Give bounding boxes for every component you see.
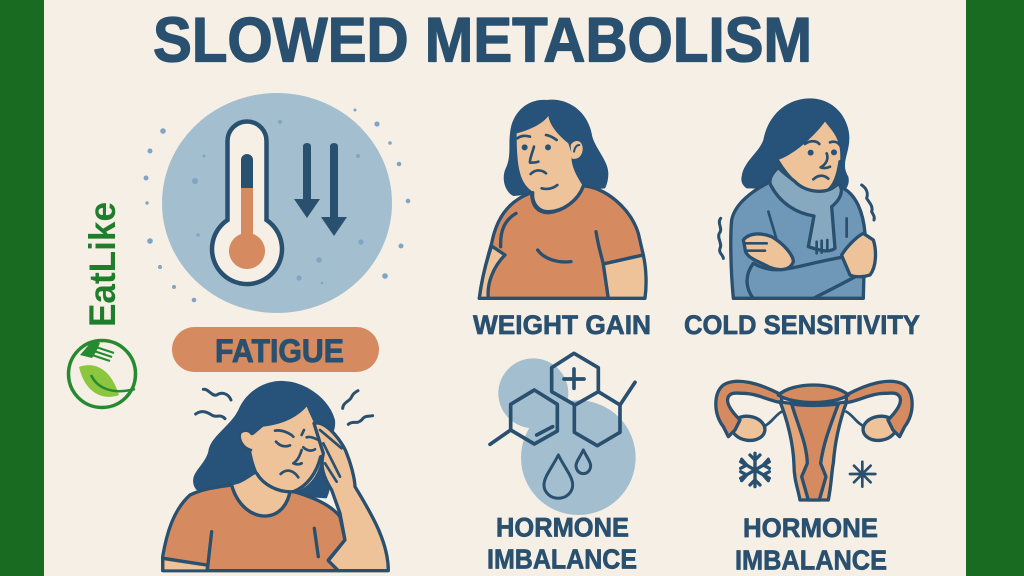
right hand [842,233,876,277]
brand wordmark: EatLike [82,202,123,327]
face and neck [517,116,583,213]
scarf fringe and coat seams [768,212,847,253]
eyes [808,149,837,156]
ligaments [763,412,865,427]
label: hormone imbalance right [735,513,887,576]
left hand [743,234,793,270]
shirt [163,485,345,571]
figure: weight gain woman [479,100,646,298]
hair [741,98,849,190]
logo badge [68,340,136,408]
label: hormone imbalance right: IMBALANCE [735,544,887,576]
facial features [517,135,557,189]
snowflake large [741,453,769,487]
arrows pointing down [294,143,347,236]
stress squiggles [196,389,373,424]
pill: fatigue label: FATIGUE [215,333,344,369]
scattered dots [144,108,410,302]
molecule hexagons [490,353,635,446]
crossed arms [747,257,858,298]
label: hormone imbalance left: IMBALANCE [487,544,637,574]
right arm [603,255,646,298]
shirt fold lines [501,213,603,264]
hair [504,100,608,196]
neck [233,473,291,516]
inner cavity [792,404,838,500]
face [240,407,322,492]
label: cold sensitivity: COLD SENSITIVITY [684,310,920,340]
blue blobs [498,358,636,515]
figure: fatigued woman holding head [163,381,388,571]
title: SLOWED METABOLISM [153,6,812,76]
icon: uterus with snowflakes [716,381,912,500]
uterus body [780,402,847,500]
fallopian tubes [716,381,912,437]
icon: hormone molecules and drops [490,353,636,515]
snowflake small [850,462,875,487]
left arm [479,246,505,298]
arm and hand [314,423,388,571]
shiver squiggles [719,185,874,258]
face [778,122,840,192]
label: hormone imbalance left: HORMONE [496,512,629,542]
facial features [275,430,318,477]
eyes [522,144,551,150]
facial features [805,141,840,179]
coat [731,182,865,298]
label: hormone imbalance right: HORMONE [743,513,878,543]
left forearm [165,561,205,569]
label: weight gain: WEIGHT GAIN [473,310,651,340]
hormone drops [544,450,591,498]
logo: EatLike [68,202,136,408]
blue circle backdrop [162,93,392,313]
figure: cold sensitive woman in scarf [719,98,876,298]
fundus [778,385,848,402]
label: hormone imbalance left [487,512,637,574]
ovaries [730,414,898,443]
pill: fatigue label [172,327,379,372]
hair [193,381,335,498]
shirt [479,186,643,298]
thermometer [212,122,282,284]
panel: thermometer icon with falling temperature [144,93,410,313]
scarf [770,167,841,251]
sleeve and cuff lines [163,528,318,570]
